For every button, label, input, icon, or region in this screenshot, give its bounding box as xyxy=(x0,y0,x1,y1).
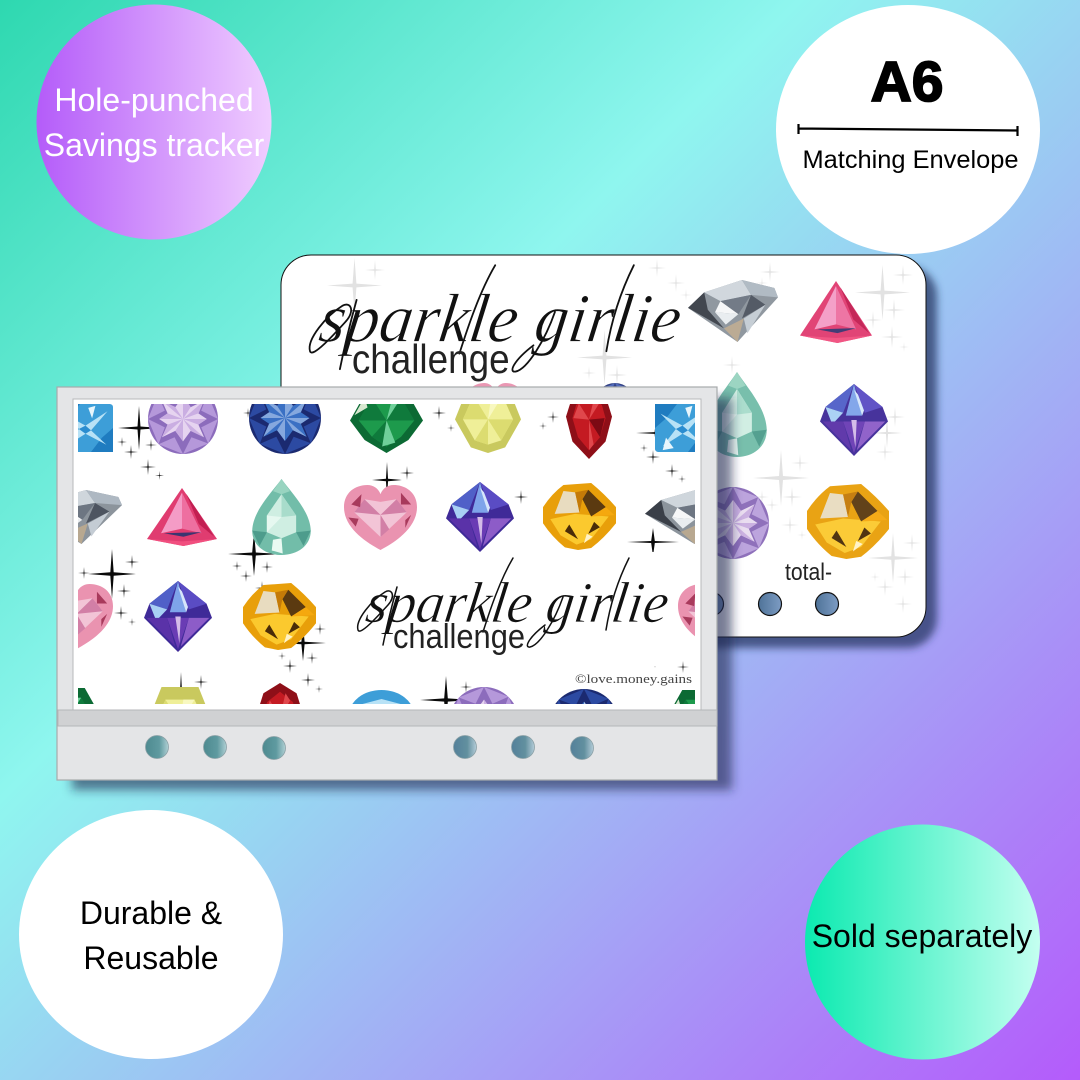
front sleeve card xyxy=(30,382,751,790)
front punched holes xyxy=(146,736,594,760)
gems row 4 xyxy=(78,683,695,704)
copyright handle: ©love.money.gains xyxy=(575,671,692,686)
back punched holes xyxy=(700,592,838,616)
callout: A6 matching envelope: Matching Envelope xyxy=(803,146,1018,174)
callout: A6 matching envelope xyxy=(776,5,1040,254)
callout: durable and reusable: Reusable xyxy=(83,940,219,976)
callout: A6 matching envelope: A6 xyxy=(871,50,943,114)
front title xyxy=(358,558,673,656)
gems row 3 xyxy=(78,552,695,666)
binding band xyxy=(58,710,717,726)
callout: durable and reusable: Durable & xyxy=(80,895,222,931)
front title: sparkle girlie xyxy=(362,570,673,635)
callout: sold separately: Sold separately xyxy=(812,918,1032,954)
callout: sold separately xyxy=(805,824,1040,1060)
total label: total- xyxy=(785,559,832,586)
callout: hole-punched savings tracker xyxy=(36,4,272,240)
back title: challenge xyxy=(352,336,510,382)
callout: durable and reusable xyxy=(19,810,283,1059)
back title: sparkle girlie xyxy=(315,281,687,358)
front title: challenge xyxy=(393,618,525,656)
black sparkles xyxy=(78,406,689,724)
back gems xyxy=(465,280,889,559)
gems row 1 xyxy=(78,404,695,459)
gems row 2 xyxy=(78,479,695,555)
back title xyxy=(310,265,687,382)
gem pattern xyxy=(78,404,695,704)
faint back sparkles xyxy=(327,258,921,613)
callout: hole-punched savings tracker: Savings tracker xyxy=(44,127,265,163)
back card: sparkle girlie tracker xyxy=(281,255,937,648)
callout: hole-punched savings tracker: Hole-punched xyxy=(54,82,254,118)
